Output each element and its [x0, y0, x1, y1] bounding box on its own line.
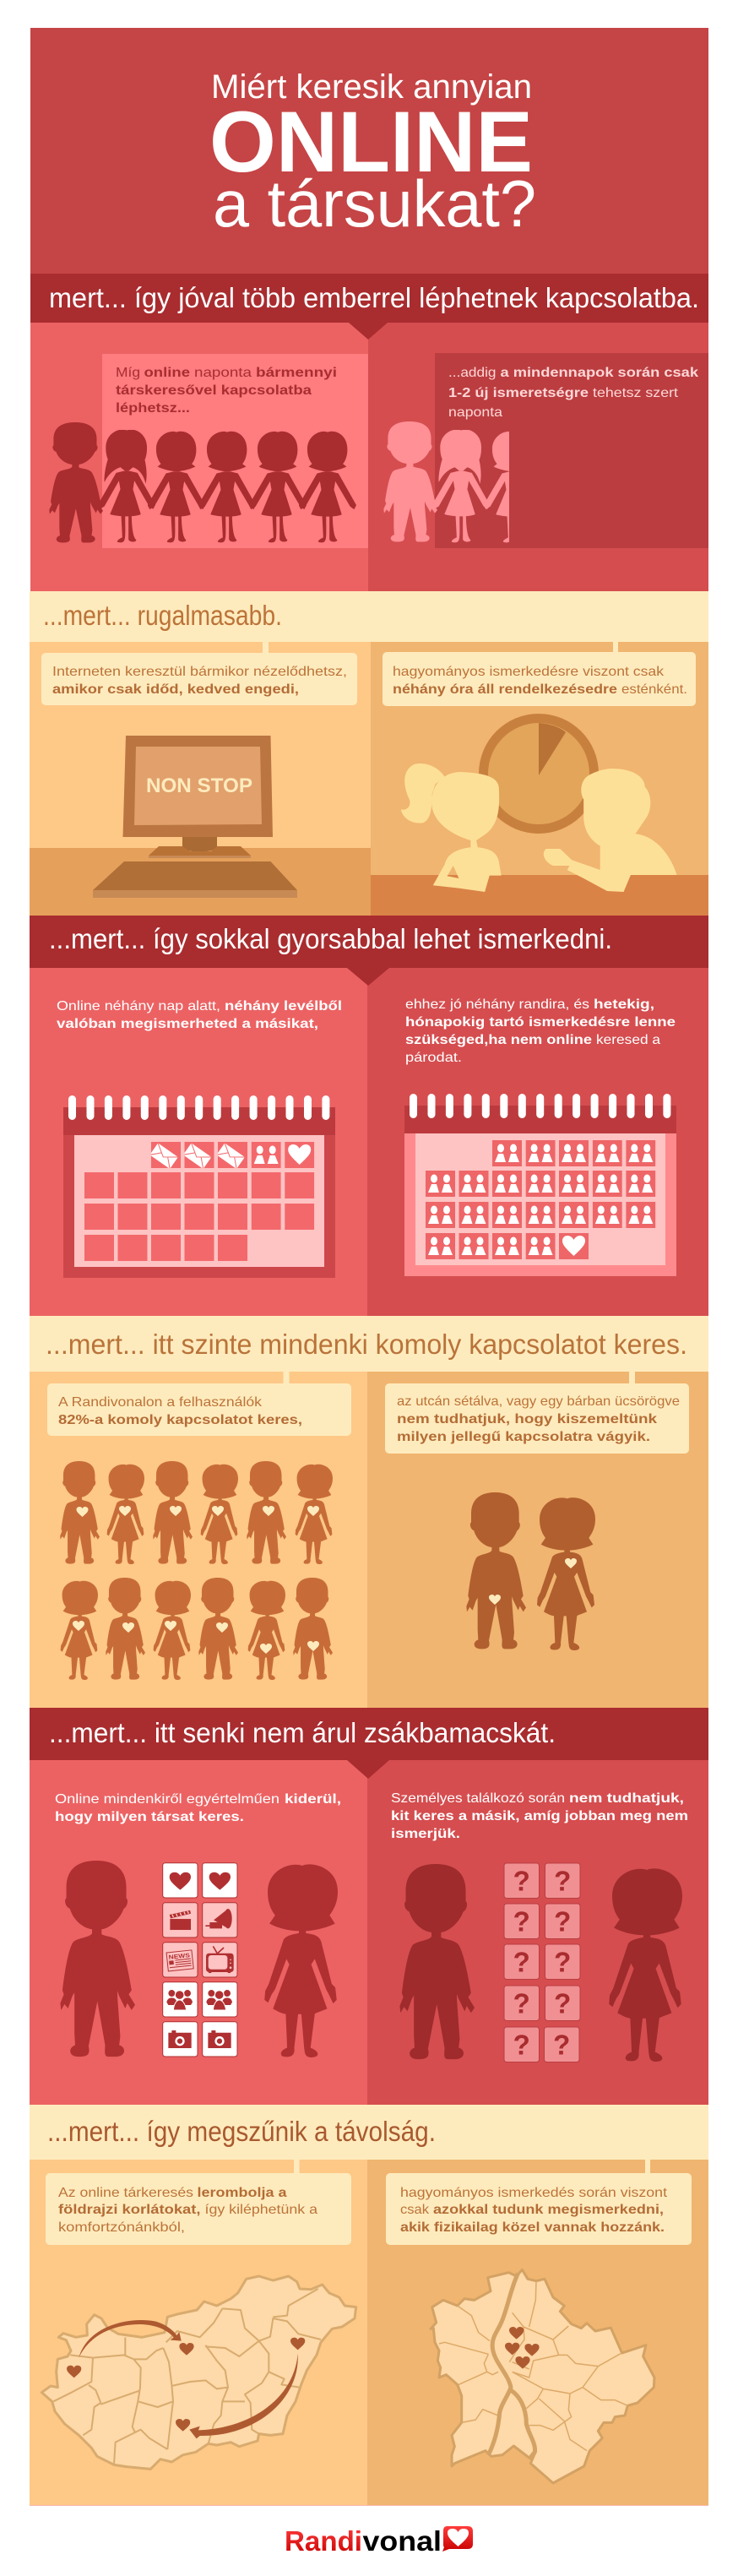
- question cards: ?: [554, 1865, 571, 1897]
- section 4: serious relationships: [30, 1316, 708, 1708]
- right text: 1-2 új ismeretségre: [448, 386, 589, 400]
- icon: television: [206, 1946, 234, 1973]
- panel: right: [371, 642, 708, 916]
- heading band: ...mert... itt szinte mindenki komoly kapcsolatot keres.: [46, 1329, 687, 1360]
- question cards: ?: [513, 1988, 530, 2019]
- left text: online: [144, 366, 190, 380]
- left text: társkeresővel kapcsolatba: [116, 383, 312, 398]
- question cards: ?: [513, 1905, 530, 1937]
- callout left: földrajzi korlátokat,: [58, 2203, 201, 2217]
- left text: Online néhány nap alatt,: [57, 999, 220, 1014]
- people grid with hearts: [60, 1461, 333, 1680]
- heading band: ...mert... így sokkal gyorsabbal lehet ismerkedni.: [49, 923, 612, 954]
- right table: [371, 875, 708, 916]
- callout right: az utcán sétálva, vagy egy bárban ücsörögve: [397, 1394, 680, 1409]
- question cards: ?: [513, 1865, 530, 1897]
- callout right: [383, 642, 696, 706]
- panel: right: [368, 323, 708, 591]
- callout right: nem tudhatjuk, hogy kiszemeltünk: [397, 1412, 657, 1427]
- right couple: [399, 1864, 682, 2062]
- hearts on map: [67, 2338, 305, 2432]
- heading band: [30, 274, 708, 340]
- heading band: [30, 2105, 708, 2160]
- title panel: [30, 28, 708, 274]
- map: Budapest: [431, 2269, 654, 2483]
- river Danube: [488, 2274, 535, 2459]
- right text: keresed a: [596, 1033, 660, 1047]
- panel: right: [367, 968, 708, 1316]
- left text: kiderül,: [285, 1792, 341, 1807]
- callout left: így kiléphetünk a: [204, 2203, 317, 2217]
- left text: [57, 999, 342, 1031]
- section 5: no surprises: [30, 1708, 708, 2105]
- map: Hungary: [41, 2276, 356, 2469]
- right text: ...addig: [448, 366, 497, 380]
- interest cards: [163, 1863, 237, 2057]
- left text: bármennyi: [256, 366, 337, 380]
- heading band: [30, 916, 708, 986]
- question cards: ?: [513, 1946, 530, 1978]
- few people holding hands: [383, 421, 509, 542]
- callout right: néhány óra áll rendelkezésedre: [393, 682, 617, 697]
- callout right: hagyományos ismerkedés során viszont: [400, 2186, 668, 2200]
- question cards: ?: [554, 1905, 571, 1937]
- icon: clapperboard: [170, 1910, 191, 1930]
- right text: tehetsz szert: [593, 386, 679, 400]
- title line 2: ONLINE: [209, 94, 533, 190]
- panel: left: [30, 1372, 367, 1708]
- right text: Személyes találkozó során: [391, 1791, 565, 1806]
- left text: hogy milyen társat keres.: [55, 1810, 244, 1824]
- callout right: [386, 2160, 692, 2245]
- panel: left: [30, 642, 371, 916]
- section 2: flexibility: [30, 591, 708, 916]
- arrows on map: [79, 2320, 298, 2438]
- calendar right: [404, 1094, 676, 1276]
- section 3: speed: [30, 916, 708, 1316]
- callout left: lerombolja a: [198, 2186, 287, 2200]
- callout right: milyen jellegű kapcsolatra vágyik.: [397, 1430, 650, 1444]
- question cards: ?: [554, 1946, 571, 1978]
- section 6: distance: [30, 2105, 708, 2505]
- question cards: ?: [513, 2029, 530, 2061]
- question cards: ?: [554, 1988, 571, 2019]
- left text: naponta: [194, 366, 252, 380]
- logo: Randivonal: vonal: [363, 2525, 442, 2557]
- logo: Randivonal: [285, 2525, 473, 2557]
- question cards: [504, 1863, 580, 2062]
- heading band: [30, 591, 708, 642]
- couple talking: [401, 764, 677, 892]
- right text: ehhez jó néhány randira, és: [405, 997, 589, 1012]
- title line 1: Miért keresik annyian: [211, 68, 532, 106]
- left couple: [60, 1861, 338, 2057]
- heading band: [30, 1708, 708, 1779]
- panel: left: [30, 323, 368, 591]
- right text: nem tudhatjuk,: [569, 1791, 684, 1806]
- icon: heart speech bubble: [442, 2526, 473, 2552]
- callout right: akik fizikailag közel vannak hozzánk.: [400, 2220, 665, 2235]
- heading band: ...mert... így megszűnik a távolság.: [47, 2116, 436, 2147]
- callout left: Az online tárkeresés: [58, 2186, 193, 2200]
- heading band: ...mert... itt senki nem árul zsákbamacskát.: [49, 1717, 556, 1748]
- heading band: mert... így jóval több emberrel léphetnek kapcsolatba.: [49, 282, 699, 313]
- left text: Míg: [116, 366, 140, 380]
- callout left: Interneten keresztül bármikor nézelődhetsz,: [52, 665, 347, 679]
- callout left: A Randivonalon a felhasználók: [58, 1395, 263, 1410]
- hearts on map: [505, 2327, 540, 2369]
- left text: valóban megismerheted a másikat,: [57, 1017, 318, 1031]
- heading band: ...mert... rugalmasabb.: [43, 600, 282, 631]
- panel: right: [367, 2160, 708, 2505]
- callout right: [385, 1372, 689, 1454]
- heading band: [30, 1316, 708, 1372]
- callout right: esténként.: [621, 682, 687, 697]
- right text: kit keres a másik, amíg jobban meg nem: [391, 1809, 688, 1823]
- panel: left: [30, 2160, 367, 2505]
- left text: [116, 366, 337, 416]
- many people holding hands: [49, 422, 356, 542]
- icon: computer non stop: [93, 736, 297, 898]
- logo: Randivonal: Randi: [285, 2525, 362, 2557]
- title line 3: a társukat?: [213, 166, 536, 241]
- left floor: [30, 848, 371, 916]
- right text: ismerjük.: [391, 1827, 460, 1841]
- right text: [391, 1791, 688, 1841]
- callout left: [41, 642, 357, 705]
- right text: [405, 997, 676, 1065]
- callout right: hagyományos ismerkedésre viszont csak: [393, 665, 665, 679]
- couple with hearts: [466, 1492, 595, 1650]
- left text: léphetsz...: [116, 401, 190, 416]
- callout right: azokkal tudunk megismerkedni,: [433, 2203, 664, 2217]
- callout left: amikor csak időd, kedved engedi,: [52, 682, 299, 697]
- icon: newspaper: [166, 1950, 193, 1971]
- calendar left: [63, 1095, 335, 1278]
- right text: hetekig,: [594, 997, 654, 1012]
- left text: néhány levélből: [225, 999, 342, 1014]
- right text: naponta: [448, 405, 502, 420]
- callout left: [47, 1372, 351, 1436]
- callout left: komfortzónánkból,: [58, 2220, 185, 2235]
- callout right: csak: [400, 2203, 430, 2217]
- panel: left: [30, 968, 367, 1316]
- left inner box: [102, 354, 368, 548]
- callout left: [46, 2160, 351, 2245]
- icon: computer non stop: NON STOP: [146, 774, 252, 797]
- section 1: contacts: [30, 274, 708, 591]
- left text: Online mindenkiről egyértelműen: [55, 1792, 279, 1807]
- left text: [55, 1792, 341, 1824]
- bottom edge line: [30, 2505, 708, 2506]
- right inner box: [435, 353, 708, 548]
- icon: wall clock: [479, 714, 599, 834]
- right text: párodat.: [405, 1051, 462, 1065]
- question cards: ?: [553, 2029, 570, 2061]
- right text: hónapokig tartó ismerkedésre lenne: [405, 1015, 676, 1030]
- icon: newspaper: NEWS: [168, 1953, 191, 1961]
- right text: szükséged,ha nem online: [405, 1033, 592, 1047]
- right text: [448, 366, 698, 420]
- panel: right: [367, 1372, 708, 1708]
- panel: left: [30, 1760, 367, 2105]
- icon: gramophone: [205, 1909, 232, 1928]
- right text: a mindennapok során csak: [500, 366, 698, 380]
- panel: right: [367, 1760, 708, 2105]
- callout left: 82%-a komoly kapcsolatot keres,: [58, 1413, 302, 1427]
